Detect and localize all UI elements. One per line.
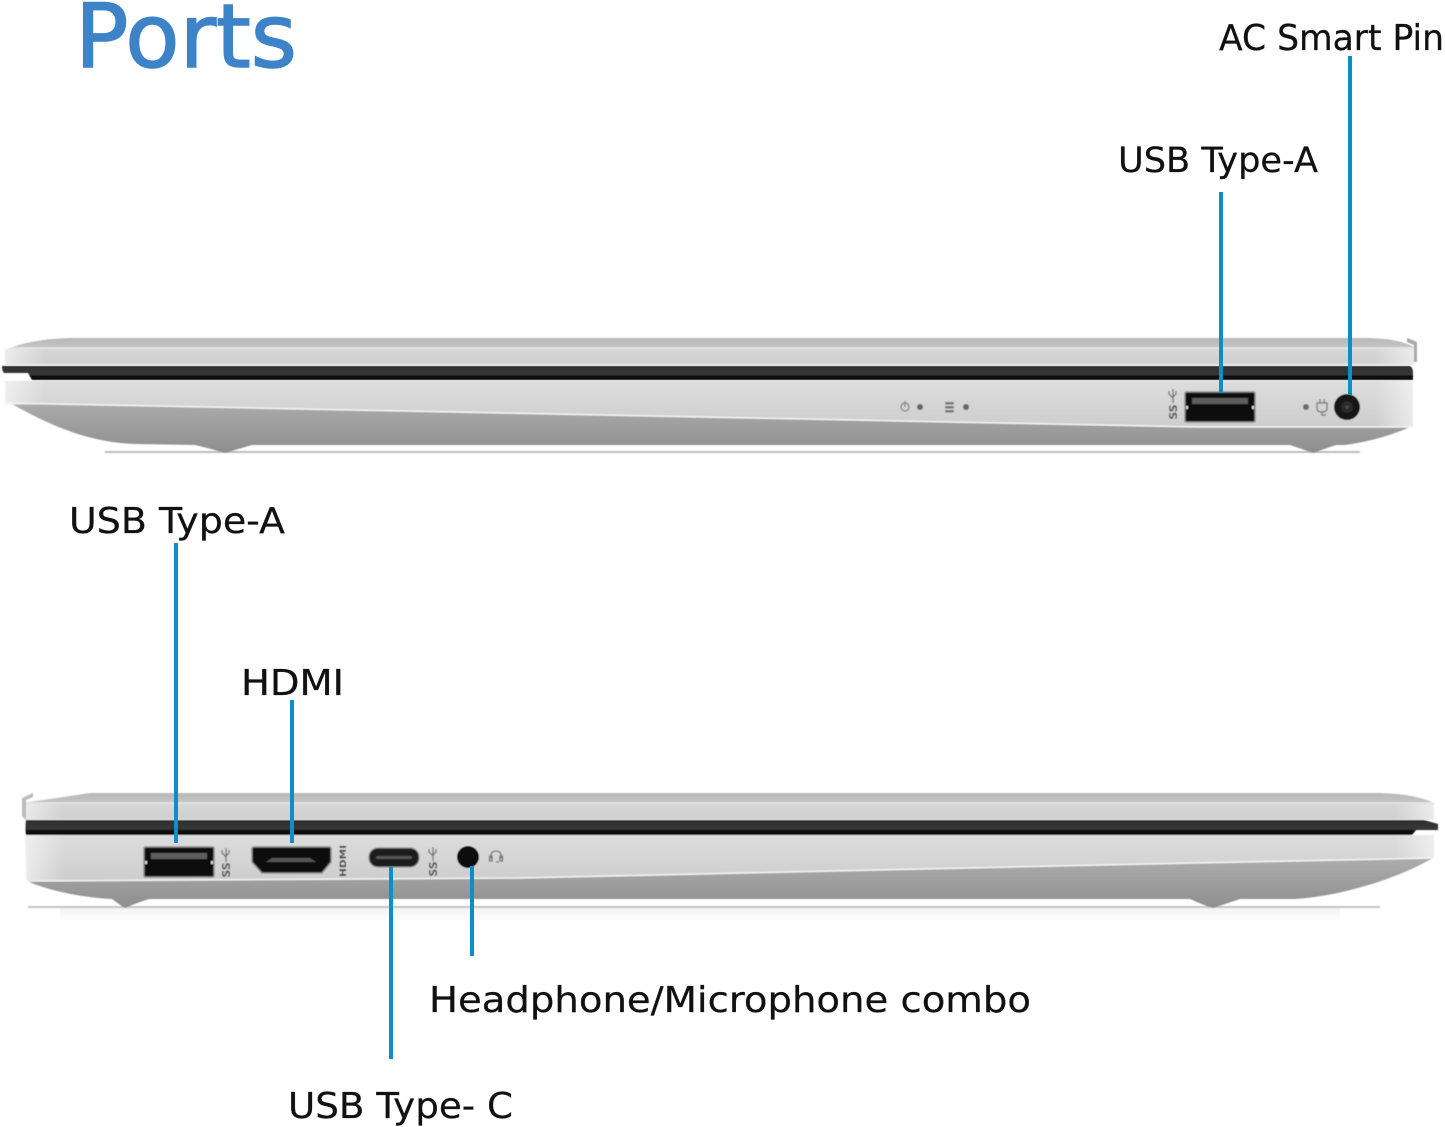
lid tab: [22, 793, 33, 820]
hinge: [2, 366, 1413, 380]
lid: [22, 793, 1434, 820]
HDMI logo: HDMI: [339, 845, 349, 877]
charging light and plug icon: [1303, 399, 1327, 415]
USB Type-A port: [1185, 392, 1255, 422]
leader: USB Type-A left: [174, 543, 178, 843]
label: USB Type-C: USB Type- C: [288, 1086, 513, 1127]
underside: [27, 858, 1433, 908]
base wedge: [5, 381, 1413, 427]
underside: [8, 400, 1412, 453]
base wedge: [25, 835, 1434, 881]
leader: headphone: [470, 866, 474, 956]
label: HDMI: HDMI: [241, 663, 344, 704]
USB logo: SS: [1167, 404, 1180, 420]
headphone jack: [457, 846, 479, 868]
lid tab: [1407, 338, 1417, 362]
label: Headphone/Microphone combo: Headphone/Microphone combo: [429, 980, 1031, 1021]
USB logo: SS: [427, 861, 440, 877]
USB Type-A port: [144, 847, 214, 877]
leader: USB Type-C: [389, 867, 393, 1059]
floor reflection: [60, 908, 1340, 922]
leader lines: [174, 56, 1352, 1059]
leader: USB Type-A right: [1219, 192, 1223, 393]
USB logo: [1167, 389, 1180, 420]
label: USB Type-A right: USB Type-A: [1118, 141, 1318, 181]
headset icon: [490, 851, 502, 862]
USB Type-C port: [369, 848, 419, 867]
leader: AC smart pin: [1348, 56, 1352, 395]
USB logo: [220, 848, 233, 878]
label: USB Type-A left: USB Type-A: [69, 501, 285, 542]
AC smart pin jack: [1334, 394, 1360, 420]
floor line: [105, 451, 1360, 453]
hinge: [26, 820, 1438, 835]
USB logo: SS: [220, 862, 233, 878]
floor line: [28, 906, 1380, 908]
USB logo: [427, 847, 440, 877]
laptop: left side view: [22, 793, 1438, 922]
HDMI port: [252, 847, 331, 873]
laptop: right side view: [2, 338, 1417, 453]
lid: [5, 338, 1414, 365]
leader: HDMI: [290, 700, 294, 843]
status lights: [901, 401, 969, 412]
